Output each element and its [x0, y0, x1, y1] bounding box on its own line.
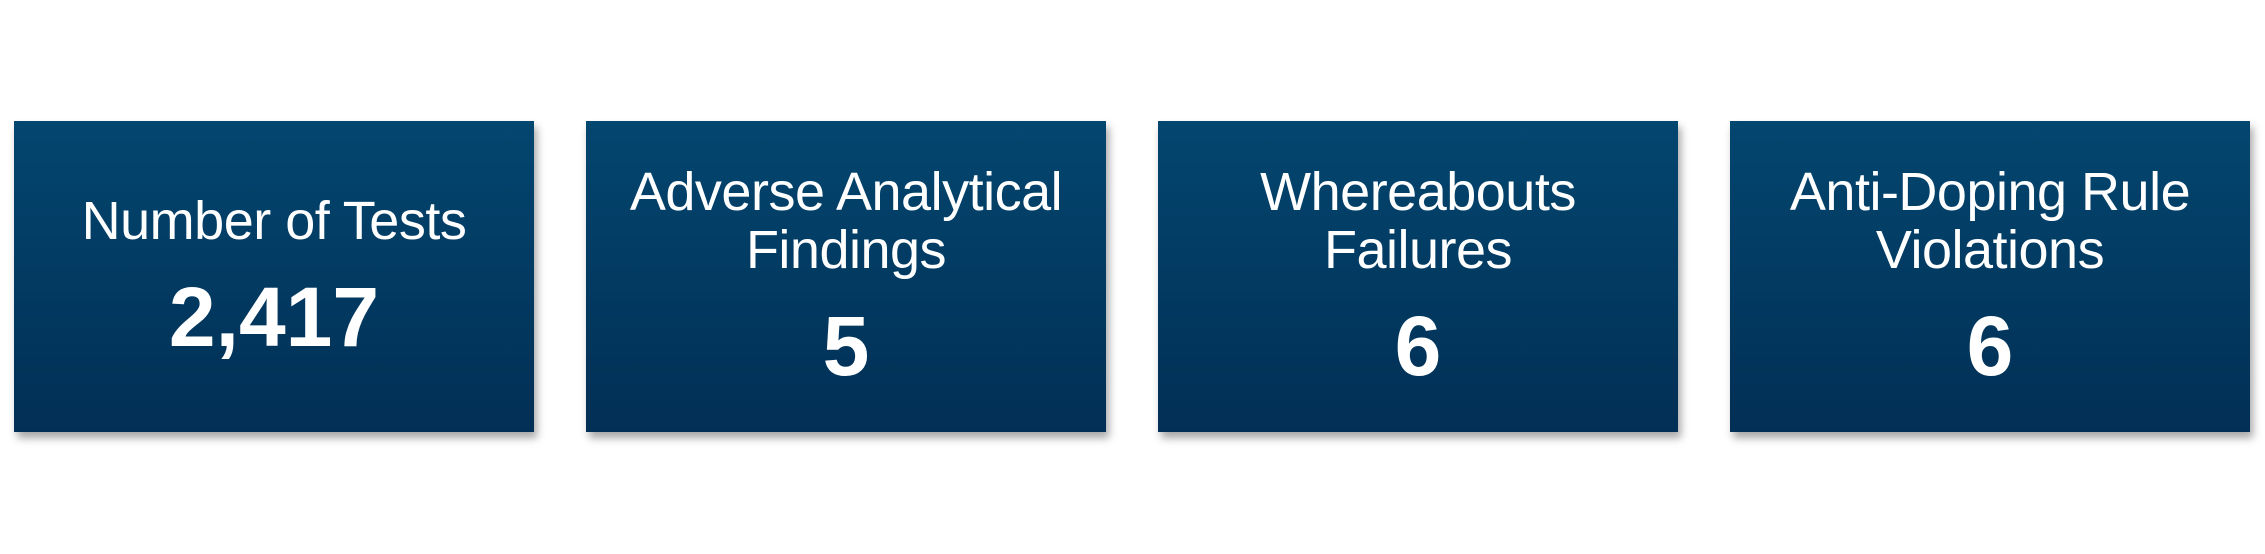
- heading: anti-doping rule violations: [1790, 162, 2190, 280]
- heading: anti-doping rule violations: Anti-Doping Rule: [1790, 162, 2190, 222]
- heading: whereabouts failures: Whereabouts: [1260, 162, 1576, 222]
- heading: adverse analytical findings: [630, 162, 1062, 280]
- panel: whereabouts failures: [1158, 121, 1678, 432]
- heading: whereabouts failures: [1260, 162, 1576, 280]
- panel: anti-doping rule violations: [1730, 121, 2250, 432]
- value: 6: 6: [1967, 299, 2013, 393]
- heading: number of tests: Number of Tests: [82, 191, 466, 251]
- heading: adverse analytical findings: Findings: [746, 220, 946, 280]
- value: 6: 6: [1395, 299, 1441, 393]
- value: 5: 5: [823, 299, 869, 393]
- value: 2,417: 2,417: [169, 270, 379, 364]
- panel: adverse analytical findings: [586, 121, 1106, 432]
- panel: number of tests: [14, 121, 534, 432]
- heading: whereabouts failures: Failures: [1324, 220, 1512, 280]
- heading: adverse analytical findings: Adverse Analytical: [630, 162, 1062, 222]
- heading: anti-doping rule violations: Violations: [1876, 220, 2104, 280]
